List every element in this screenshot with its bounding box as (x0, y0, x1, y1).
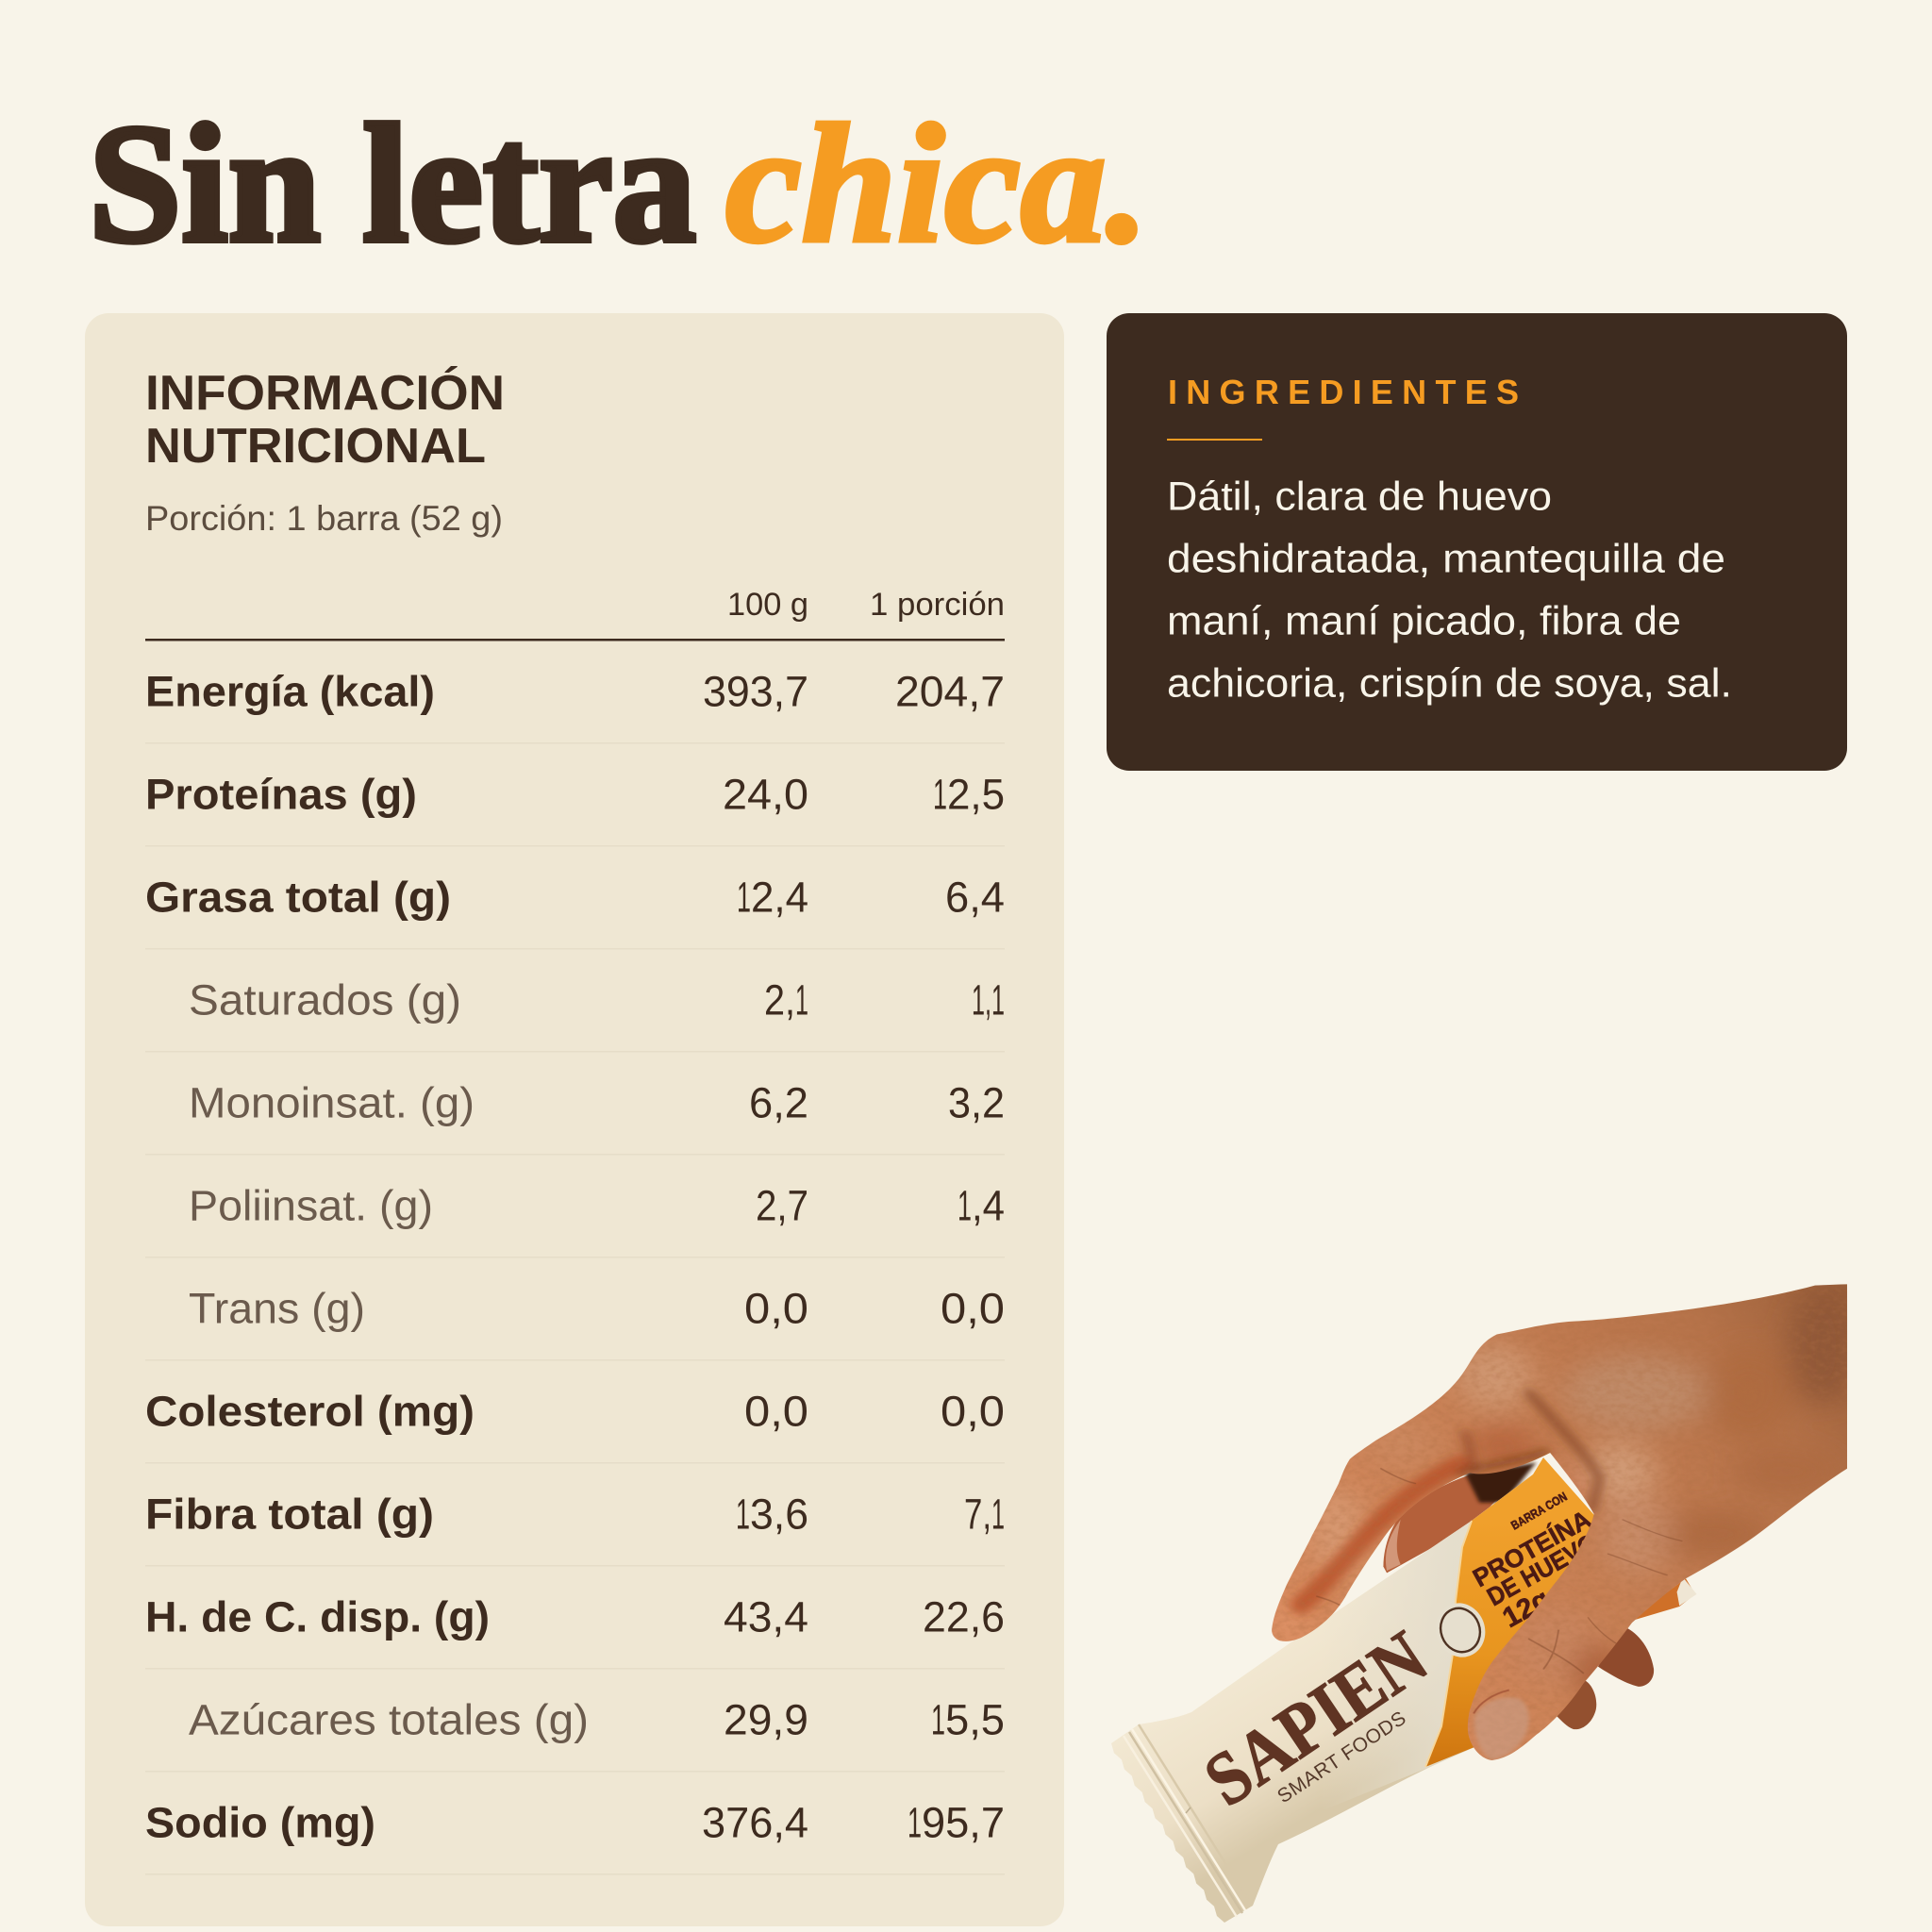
row: hidratos de carbono: H. de C. disp. (g) (145, 1592, 490, 1641)
row: monoinsaturados: 3,2 (948, 1079, 1005, 1126)
bar label: DE HUEVO (1482, 1528, 1602, 1611)
bar tail behind thumb (1627, 1577, 1697, 1622)
panel heading: INFORMACIÓN (145, 366, 505, 421)
row: energía: 393,7 (703, 668, 808, 715)
row: saturados: 2,1 (764, 975, 808, 1024)
protein bar wrapper (1111, 1457, 1623, 1923)
row: monoinsaturados: Monoinsat. (g) (189, 1079, 475, 1126)
row: azúcares: 15,5 (931, 1696, 1005, 1743)
title (89, 90, 1149, 277)
panel heading (145, 366, 505, 474)
row: poliinsaturados: 1,4 (958, 1181, 1005, 1230)
row: hidratos de carbono: 22,6 (923, 1592, 1005, 1641)
row: sodio: 195,7 (908, 1798, 1005, 1847)
ingredients list: achicoria, crispín de soya, sal. (1167, 660, 1732, 706)
row: energía: 204,7 (895, 668, 1005, 715)
row: grasa total: Grasa total (g) (145, 874, 451, 921)
ingredients list (1167, 474, 1732, 706)
title: orange word: chica. (725, 90, 1149, 277)
column headers: 1 porción (870, 587, 1005, 623)
row: fibra total (145, 1491, 1005, 1538)
bar label: 12g (1497, 1583, 1556, 1634)
ingredients list: maní, maní picado, fibra de (1167, 598, 1681, 643)
ingredients list: Dátil, clara de huevo (1167, 474, 1552, 519)
back fingers (1383, 1462, 1654, 1729)
row: proteínas: 12,5 (933, 770, 1005, 819)
row: hidratos de carbono: 43,4 (724, 1592, 808, 1641)
wrapper crimp lines (1124, 1724, 1252, 1917)
column headers: 100 g (727, 587, 808, 623)
wrapper body (1111, 1474, 1547, 1923)
row: poliinsaturados: Poliinsat. (g) (189, 1181, 433, 1230)
row: fibra total: 13,6 (736, 1491, 808, 1538)
row: azúcares (189, 1696, 1005, 1743)
row: proteínas: Proteínas (g) (145, 770, 417, 819)
row: trans: 0,0 (941, 1285, 1005, 1332)
row: energía (145, 668, 1005, 715)
row: saturados: 1,1 (972, 975, 1005, 1024)
bar label: PROTEÍNA (1468, 1504, 1596, 1592)
row: monoinsaturados (189, 1079, 1005, 1126)
row: grasa total: 6,4 (945, 874, 1005, 921)
title: dark words: Sin letra (89, 90, 696, 277)
serving size: Porción: 1 barra (52 g) (145, 499, 503, 538)
row: hidratos de carbono (145, 1592, 1005, 1641)
row: grasa total: 12,4 (737, 874, 808, 921)
row: poliinsaturados (189, 1181, 1005, 1230)
row: colesterol: Colesterol (mg) (145, 1387, 475, 1436)
panel background (85, 313, 1064, 1926)
row: colesterol: 0,0 (744, 1387, 808, 1436)
front hand (1272, 1284, 1847, 1760)
row: monoinsaturados: 6,2 (749, 1079, 808, 1126)
row: colesterol: 0,0 (941, 1387, 1005, 1436)
row: saturados: Saturados (g) (189, 975, 461, 1024)
ingredients heading: INGREDIENTES (1168, 373, 1527, 411)
brand tagline: SMART FOODS (1274, 1707, 1410, 1807)
panel: nutrition information (85, 313, 1064, 1926)
skin texture (1274, 1315, 1826, 1760)
row: proteínas: 24,0 (723, 770, 808, 819)
row: trans: Trans (g) (189, 1285, 365, 1332)
bar label (1468, 1490, 1602, 1634)
row: trans (189, 1285, 1005, 1332)
row: fibra total: 7,1 (964, 1491, 1005, 1538)
bar label: BARRA CON (1508, 1490, 1570, 1533)
hand shading (1266, 1286, 1858, 1703)
column headers (727, 587, 1005, 623)
row: sodio: Sodio (mg) (145, 1798, 375, 1847)
ingredients background (1107, 313, 1847, 771)
row: sodio (145, 1798, 1005, 1847)
row: proteínas (145, 770, 1005, 819)
brand name: SAPIEN (1191, 1615, 1441, 1823)
row: azúcares: Azúcares totales (g) (189, 1696, 589, 1743)
row: azúcares: 29,9 (724, 1696, 808, 1743)
thumbnail (1474, 1697, 1529, 1760)
egg logo (1428, 1596, 1492, 1664)
hand wrinkles (1317, 1469, 1682, 1673)
row: sodio: 376,4 (702, 1798, 808, 1847)
row: poliinsaturados: 2,7 (756, 1181, 808, 1230)
row: energía: Energía (kcal) (145, 668, 435, 715)
ingredients list: deshidratada, mantequilla de (1167, 536, 1725, 581)
orange band (1425, 1457, 1623, 1767)
row: trans: 0,0 (744, 1285, 808, 1332)
row: colesterol (145, 1387, 1005, 1436)
row: grasa total (145, 874, 1005, 921)
panel: ingredients (1107, 313, 1847, 771)
row: saturados (189, 975, 1005, 1024)
illustration: hand holding protein bar (1111, 1264, 1874, 1923)
row: fibra total: Fibra total (g) (145, 1491, 434, 1538)
panel heading: NUTRICIONAL (145, 419, 486, 474)
hand creases (1301, 1392, 1599, 1605)
